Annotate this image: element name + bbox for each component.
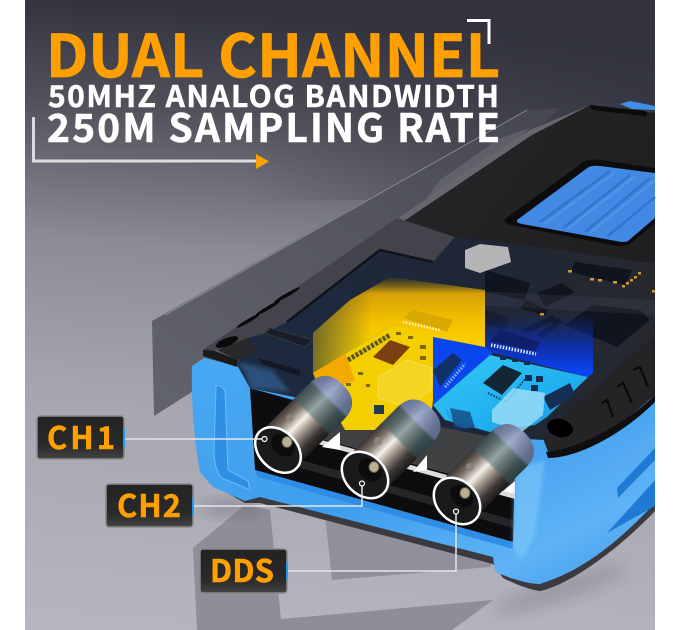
- small ic: [433, 353, 462, 387]
- right shell overlay: [543, 335, 655, 452]
- base dark edge: [208, 470, 655, 591]
- right header: [543, 383, 575, 410]
- chip on wall: [403, 310, 453, 332]
- white pad row: [403, 322, 440, 330]
- connector CH1: [246, 367, 361, 482]
- yellow pcb: [313, 310, 453, 430]
- transparent interior: [237, 237, 655, 440]
- shell hole right: [545, 416, 575, 440]
- dark top shell: [397, 105, 655, 440]
- callout: CH2: [106, 481, 364, 527]
- shell slots: [602, 367, 648, 417]
- wire: [447, 410, 475, 427]
- blue glow wall: [485, 312, 593, 377]
- callout: DDS: [200, 509, 458, 593]
- left layered bars: [258, 358, 300, 376]
- corner black lip: [203, 350, 238, 367]
- top notch: [590, 105, 647, 116]
- screen frame line: [287, 250, 433, 322]
- background shapes: [152, 108, 629, 630]
- corner bracket: [467, 20, 489, 44]
- recess: [265, 328, 313, 347]
- left shell band: [203, 218, 455, 355]
- left shell holes: [214, 286, 301, 350]
- yellow wall left fade: [313, 285, 372, 373]
- title: DUAL CHANNEL: [46, 9, 500, 94]
- blue pcb: [433, 330, 588, 432]
- pin row: [348, 335, 390, 360]
- callout: DDS: DDS: [210, 546, 274, 591]
- handle recess: [504, 159, 655, 246]
- components: [500, 356, 543, 391]
- blue lower left wall: [433, 337, 493, 405]
- shell bottom rim: [546, 395, 655, 458]
- blue handle: [517, 166, 655, 242]
- corner highlight: [513, 460, 545, 560]
- blue rubber body: [192, 358, 655, 584]
- circuit chips dark: [485, 262, 650, 347]
- callout: CH1: CH1: [47, 413, 115, 458]
- callout: CH1: [37, 413, 267, 459]
- left interior blue glass: [237, 362, 290, 392]
- chip pads: [540, 270, 655, 316]
- side chevrons: [607, 435, 655, 533]
- translucent cube: [378, 360, 432, 407]
- connector bottom: [450, 408, 475, 430]
- shell top edge: [397, 105, 590, 225]
- subtitle: sampling rate: 250M SAMPLING RATE: [47, 98, 500, 154]
- corner textured block: [217, 338, 260, 360]
- connector opening: [250, 388, 515, 542]
- device: oscilloscope: [192, 101, 655, 591]
- top ic on blue: [490, 330, 540, 351]
- callout: CH2: CH2: [117, 481, 181, 526]
- arrow: [34, 117, 269, 169]
- pin row: [491, 345, 536, 354]
- connector DDS: [424, 415, 543, 534]
- translucent cube: [492, 388, 545, 432]
- white module: [465, 244, 511, 273]
- ic on blue board: [483, 365, 522, 395]
- rail bars: [255, 432, 515, 528]
- front lip: [255, 470, 513, 549]
- components: [346, 332, 426, 387]
- top blue edge: [620, 101, 655, 110]
- side grip recess: [214, 386, 250, 490]
- ic on yellow board: [373, 340, 410, 365]
- small connector: [374, 405, 384, 414]
- connector CH2: [332, 391, 449, 508]
- translucent grey sheen: [460, 290, 655, 315]
- opening back wall: [270, 395, 515, 492]
- subtitle: bandwidth: 50MHZ ANALOG BANDWIDTH: [48, 72, 499, 116]
- yellow glow wall: [313, 277, 485, 373]
